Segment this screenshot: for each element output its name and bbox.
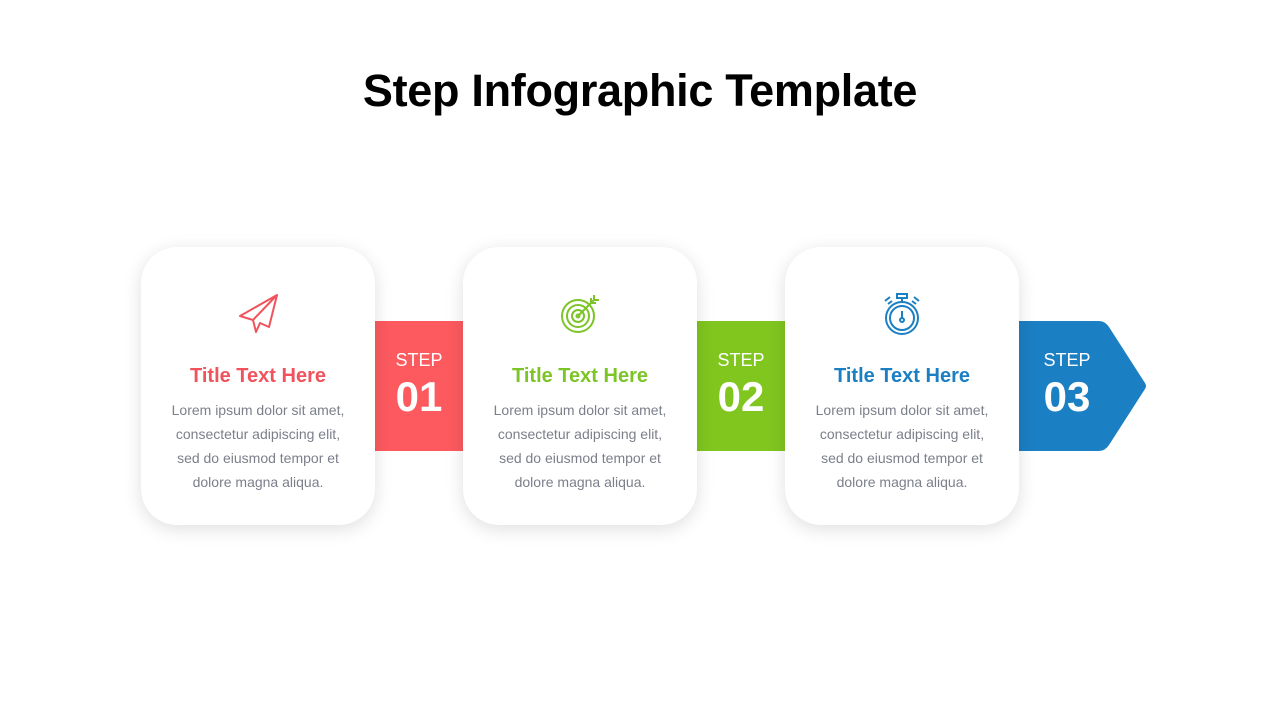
step 01 band: 01: [396, 373, 442, 420]
text block: Lorem ipsum dolor sit amet,: [172, 402, 344, 418]
text block: consectetur adipiscing elit,: [820, 426, 984, 442]
text block: [172, 402, 344, 490]
text block: sed do eiusmod tempor et: [821, 450, 983, 466]
icon: paper plane: [239, 294, 278, 333]
heading: Title Text Here: [512, 365, 648, 387]
step 03 arrow: [1019, 321, 1146, 451]
step 02 band: STEP: [717, 350, 764, 370]
step 02 band: [697, 321, 785, 451]
text block: consectetur adipiscing elit,: [498, 426, 662, 442]
text block: dolore magna aliqua.: [193, 474, 323, 490]
step 02 band: 02: [718, 373, 764, 420]
icon: stopwatch: [884, 293, 920, 335]
heading: Title Text Here: [834, 365, 970, 387]
step 01 band: [375, 321, 463, 451]
text block: dolore magna aliqua.: [515, 474, 645, 490]
text block: consectetur adipiscing elit,: [176, 426, 340, 442]
text block: sed do eiusmod tempor et: [499, 450, 661, 466]
icon: target: [561, 295, 599, 333]
panel: step 2 card: [463, 247, 697, 525]
step 03 arrow: 03: [1044, 373, 1090, 420]
text block: sed do eiusmod tempor et: [177, 450, 339, 466]
heading: Title Text Here: [190, 365, 326, 387]
title: Step Infographic Template: [363, 65, 917, 116]
step 01 band: STEP: [395, 350, 442, 370]
panel: step 1 card: [141, 247, 375, 525]
step 03 arrow: STEP: [1043, 350, 1090, 370]
text block: dolore magna aliqua.: [837, 474, 967, 490]
text block: [494, 402, 666, 490]
panel: step 3 card: [785, 247, 1019, 525]
text block: [816, 402, 988, 490]
text block: Lorem ipsum dolor sit amet,: [494, 402, 666, 418]
text block: Lorem ipsum dolor sit amet,: [816, 402, 988, 418]
